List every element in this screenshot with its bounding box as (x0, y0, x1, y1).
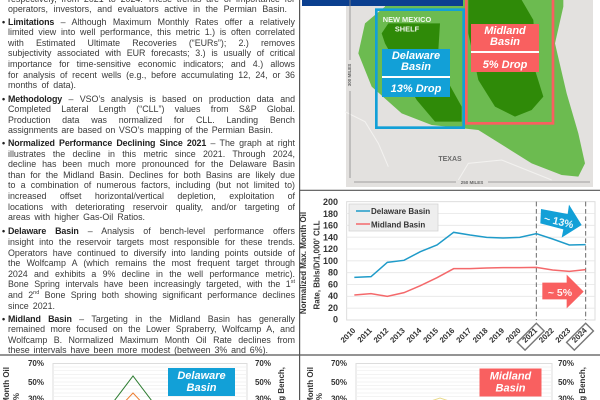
midland left axis: 50% (331, 378, 347, 387)
chart x axis year labels: 2014 (405, 326, 424, 345)
text block: normalized performance: locations with deteriorating reservoir quality, and/or targeting of (8, 202, 295, 212)
text block: normalized performance (2, 138, 295, 222)
chart y axis labels: 20 (328, 303, 338, 313)
chart x axis year labels: 2021 (520, 326, 540, 345)
text block: normalized performance: Normalized Performance Declining Since 2021 – The graph at right (8, 138, 295, 148)
map: horizontal scale: 250 MILES (461, 180, 483, 185)
arrow: midland decline (542, 275, 584, 308)
bottom chart: delaware benches (2, 359, 286, 400)
delaware left axis title (2, 367, 21, 400)
chart y axis labels: 140 (323, 232, 338, 242)
map: vertical scale: 300 MILES (347, 64, 352, 86)
line chart: normalized max month oil rate (299, 197, 595, 350)
midland left axis (331, 359, 347, 400)
text block: normalized performance: illustrates the decline in this metric since 2021. Through 2024, (8, 149, 295, 159)
text block: limitations: with Estimated Ultimate Recoveries (“EURs”); 2.) removes (8, 38, 295, 48)
text block: methodology: Completed Lateral Length (“CLL”) values from S&P Global. (8, 104, 295, 114)
callout: delaware basin (382, 49, 450, 97)
map: top navy banner (302, 0, 463, 6)
midland right axis (558, 359, 574, 400)
text block: delaware basin: Bone Spring intervals have been increasingly targeted, with the 1st (8, 279, 295, 289)
delaware left axis title: % (12, 393, 21, 400)
map: blue delaware outline (376, 10, 464, 128)
bottom chart: midland benches (306, 359, 587, 400)
text block: limitations: months of data). (8, 80, 76, 90)
delaware left axis: 50% (28, 378, 44, 387)
chart x axis year labels: 2019 (487, 326, 507, 345)
text block: limitations: importance for time-sensitive economic indicators; and 4.) allows (8, 59, 295, 69)
midland right axis title: g Bench, (578, 367, 587, 400)
delaware left axis: 70% (28, 359, 44, 368)
text block: delaware basin: 2024 and exhibits a 9% decline in the well performance metric). (8, 269, 295, 279)
midland left axis title (306, 367, 324, 400)
arrow label: midland percent: ~ 5% (548, 287, 573, 299)
text block: intro (8, 0, 295, 14)
text block: delaware basin: insight into the reservoir targets most responsible for these trends. (8, 237, 295, 247)
text block: limitations (2, 17, 295, 90)
midland label (480, 368, 542, 396)
map: midland dark green area (468, 0, 543, 117)
text block: delaware basin: the Wolfcamp A (which remains the most frequent target through (8, 258, 295, 268)
chart y axis labels: 0 (333, 315, 338, 325)
chart y axis labels: 60 (328, 279, 338, 289)
callout: midland basin (471, 24, 539, 72)
text block: limitations: for analysis of recent wells (e.g., before accumulating 12, 24, or 36 (8, 70, 295, 80)
chart y axis title: Rate, Bbls/D/1,000' CLL (312, 220, 322, 310)
chart x axis year labels: 2013 (388, 326, 407, 345)
chart legend (349, 204, 438, 231)
midland right axis: 70% (558, 359, 574, 368)
callout: midland basin: Midland (484, 25, 526, 37)
midland left axis: 70% (331, 359, 347, 368)
map: permian light green area (358, 0, 585, 177)
text block: midland basin: remained more focused on the Lower Spraberry, Wolfcamp A, and (8, 324, 295, 334)
chart: midland line (354, 267, 586, 296)
midland plot area (356, 364, 552, 400)
delaware right axis title: g Bench, (277, 367, 286, 400)
text block: delaware basin: Delaware Basin – Analysis of bench-level performance offers (8, 226, 295, 236)
delaware right axis: 50% (255, 378, 271, 387)
highlighted year diamonds (517, 323, 593, 350)
chart x axis year labels: 2010 (339, 326, 358, 345)
callout: midland basin: Basin (490, 36, 520, 48)
chart legend: Delaware Basin (371, 207, 430, 216)
text: • (2, 226, 5, 236)
chart x axis year labels: 2023 (554, 326, 573, 345)
chart x axis year labels: 2024 (570, 326, 589, 345)
midland left axis title: % (315, 393, 324, 400)
chart x axis year labels: 2017 (454, 326, 473, 345)
text block: delaware basin: since 2021. (8, 301, 55, 311)
map: new mexico shelf label: NEW MEXICO (383, 15, 431, 24)
chart x axis year labels (339, 326, 589, 345)
text block: normalized performance: increased offset horizontal/vertical depletion, exploitation of (8, 191, 295, 201)
chart x axis year labels: 2022 (537, 326, 556, 345)
text block: delaware basin (2, 226, 295, 311)
delaware label (168, 368, 235, 396)
text block: normalized performance: to a combination of numerous factors, including (but not limited to) (8, 180, 295, 190)
text: • (2, 17, 5, 27)
text block: methodology: assignments are based on VSO’s mapping of the Permian Basin. (8, 125, 273, 135)
delaware right axis: 70% (255, 359, 271, 368)
text block: normalized performance: than for the Midland Basin. Declines for both Basins are likely due (8, 170, 295, 180)
callout: midland basin: 5% Drop (483, 59, 528, 71)
delaware label: Basin (187, 382, 217, 394)
midland right axis: 50% (558, 378, 574, 387)
text block: intro: operators, investors, and evaluators active in the Permian Basin. (8, 4, 287, 14)
text block: limitations: limited view into well performance, this metric 1.) is often correlated (8, 27, 295, 37)
midland peak line (428, 398, 452, 400)
chart y axis labels: 180 (323, 209, 338, 219)
delaware left axis (28, 359, 44, 400)
delaware plot area (53, 364, 247, 400)
chart x axis year labels: 2020 (504, 326, 523, 345)
chart y axis title: Normalized Max. Month Oil (299, 212, 308, 314)
chart y axis title (299, 212, 322, 314)
text block: midland basin: Wolfcamp B. Normalized Maximum Month Oil Rate declines from (8, 335, 295, 345)
text block: limitations: Limitations – Although Maximum Monthly Rates offer a relatively (8, 17, 295, 27)
chart x axis year labels: 2018 (471, 326, 490, 345)
chart plot area (347, 202, 595, 320)
text block: normalized performance: decline has been much more pronounced for the Delaware Basin (8, 159, 295, 169)
text block: midland basin: Midland Basin – Targeting in the Midland Basin has generally (8, 314, 295, 324)
text block: delaware basin: and 2nd Bone Spring both showing significant performance declines (8, 290, 295, 300)
text: • (2, 94, 5, 104)
chart y axis labels: 100 (323, 256, 338, 266)
chart y axis labels: 80 (328, 268, 338, 278)
delaware orange peak line (118, 393, 148, 400)
chart: delaware line (354, 232, 586, 277)
text block: delaware basin: Operators have continued to diversify into landing points outside of (8, 248, 295, 258)
chart y axis labels (323, 197, 338, 325)
callout: delaware basin: 13% Drop (391, 83, 442, 95)
callout: delaware basin: Delaware (392, 50, 440, 62)
chart x axis year labels: 2016 (438, 326, 457, 345)
chart x axis year labels: 2015 (421, 326, 441, 345)
text block: midland basin: these intervals have been more modest (between 3% and 6%). (8, 345, 268, 355)
map panel (302, 0, 593, 187)
chart legend: Midland Basin (371, 220, 425, 230)
chart x axis year labels: 2012 (372, 326, 391, 345)
text block: methodology: Production data was normalized for CLL. Landing Bench (8, 115, 295, 125)
arrow label: delaware percent: ~ 13% (543, 213, 575, 231)
midland label: Basin (496, 382, 526, 394)
callout: delaware basin: Basin (401, 61, 431, 73)
map: shelf label: SHELF (395, 25, 420, 34)
midland label: Midland (490, 370, 532, 382)
text: • (2, 314, 5, 324)
map: texas label: TEXAS (438, 156, 462, 163)
chart y axis labels: 120 (323, 244, 338, 254)
text block: normalized performance: areas with higher Gas-Oil Ratios. (8, 212, 145, 222)
chart y axis labels: 40 (328, 291, 338, 301)
text: • (2, 138, 5, 148)
chart x axis year labels: 2011 (356, 326, 374, 344)
text block: midland basin (2, 314, 295, 355)
arrow: delaware decline (540, 205, 582, 238)
chart y axis labels: 200 (323, 197, 338, 207)
text block: methodology: Methodology – VSO’s analysis is based on production data and (8, 94, 295, 104)
text block: methodology (2, 94, 295, 135)
map: red midland outline (466, 0, 553, 123)
delaware label: Delaware (177, 370, 226, 382)
chart y axis labels: 160 (323, 220, 338, 230)
delaware green peak line (108, 376, 158, 400)
delaware right axis (255, 359, 271, 400)
text block: limitations: subjectivity associated with EUR forecasts; 3.) is usually of critical (8, 48, 295, 58)
map: delaware dark green area (382, 23, 462, 122)
